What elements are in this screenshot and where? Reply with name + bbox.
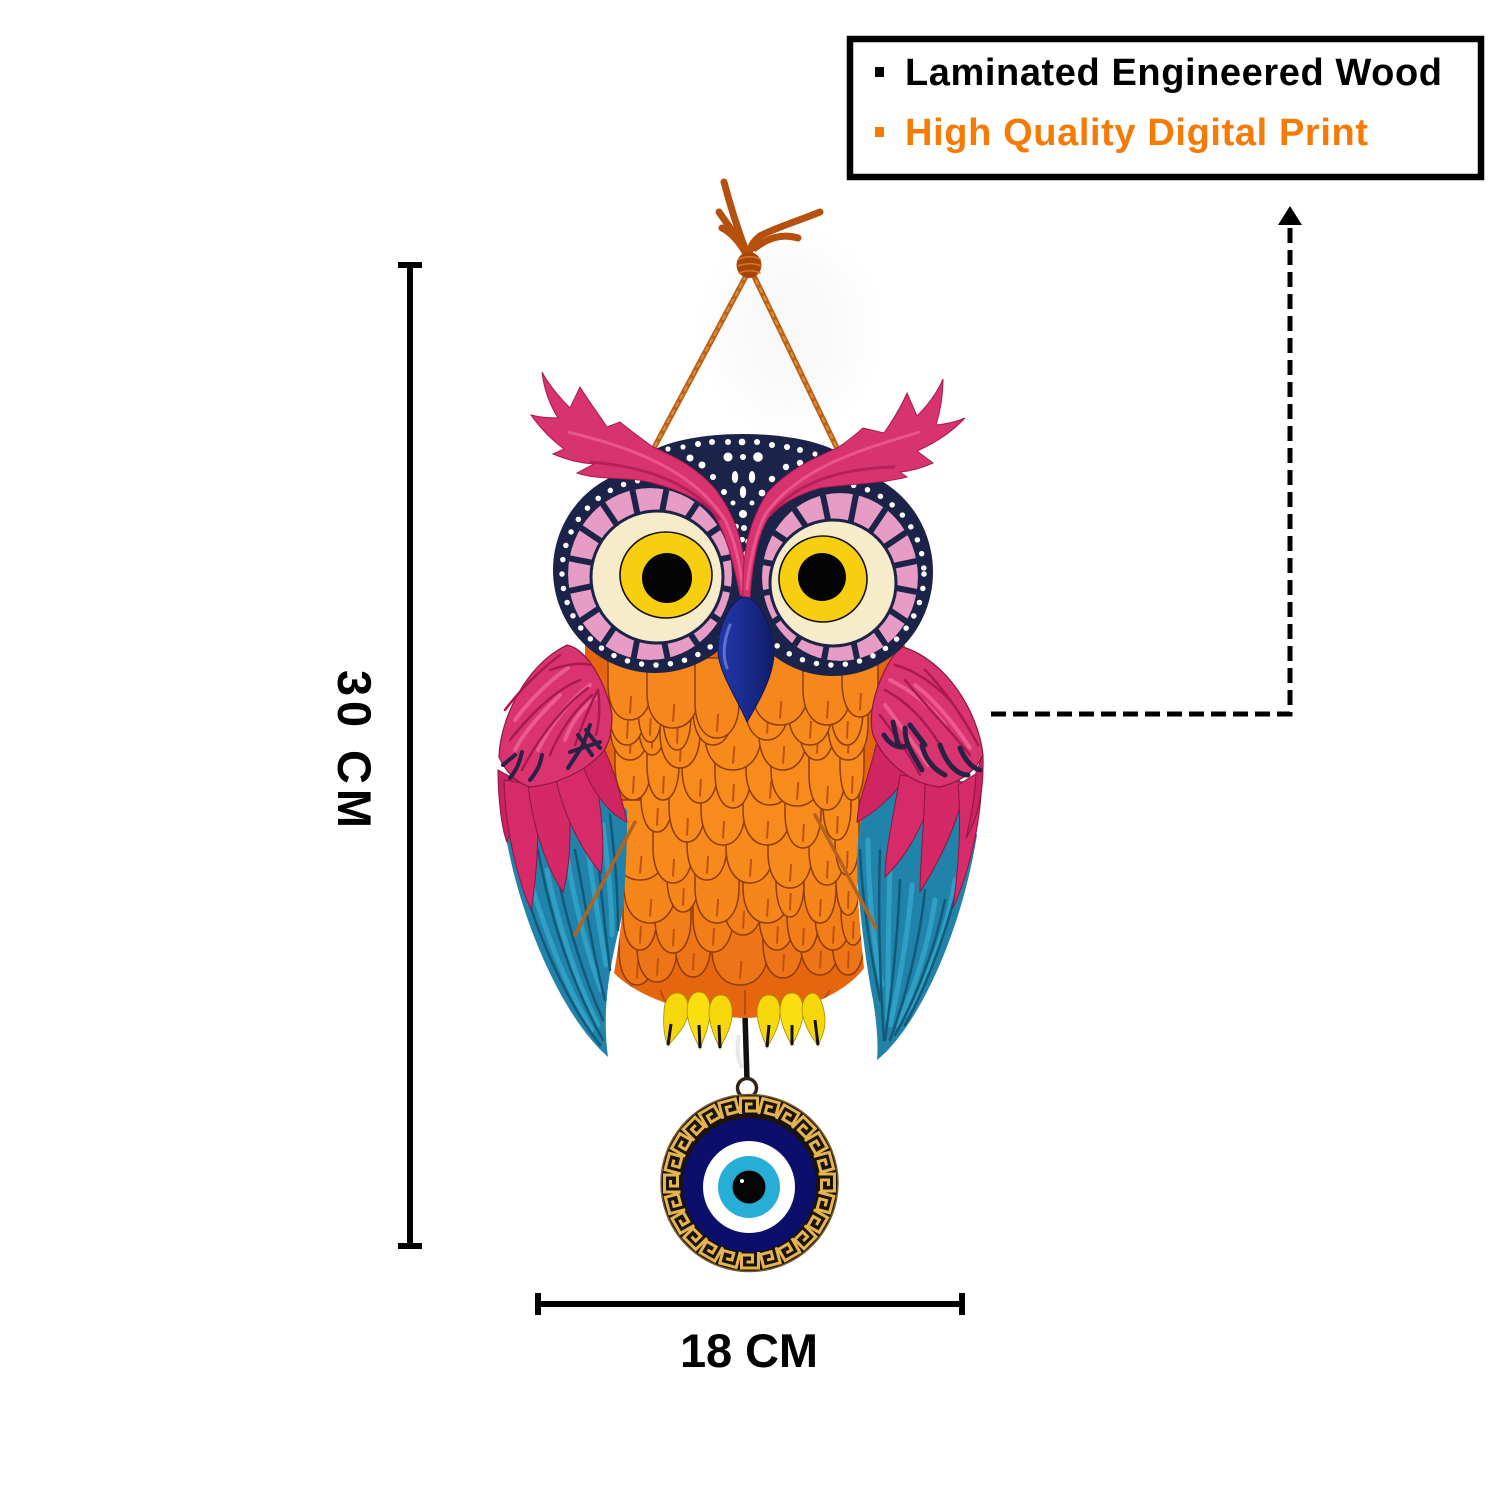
right pink ring (762, 493, 918, 661)
spec box (850, 39, 1481, 177)
height dimension line (398, 265, 422, 1246)
text: print: High Quality Digital Print (905, 112, 1368, 154)
bottom veins (630, 985, 830, 1015)
left long pink feathers (498, 740, 627, 910)
dashed arrow (991, 206, 1302, 714)
width label: 18 CM (680, 1324, 818, 1377)
face rim dots (562, 479, 924, 665)
lower rope on wings (575, 815, 876, 935)
body scales (585, 637, 905, 1020)
hanging rope (655, 182, 836, 446)
right brow (743, 379, 965, 598)
beak (718, 597, 774, 722)
dark face discs (553, 434, 933, 676)
forehead dots (665, 439, 818, 531)
left eye (591, 511, 723, 643)
bullet: material (875, 67, 884, 77)
evil eye amulet (661, 1094, 838, 1272)
right long pink feathers (857, 745, 983, 908)
right wing shoulder (871, 647, 983, 787)
head (531, 372, 965, 722)
width dimension line (538, 1293, 962, 1315)
bullet: print (875, 127, 884, 137)
height label: 30 CM (328, 670, 381, 828)
left wing shoulder (499, 645, 612, 787)
right eye (770, 520, 896, 646)
claws (664, 992, 825, 1049)
greek key band (664, 1098, 834, 1268)
owl (498, 372, 983, 1060)
left claws (664, 992, 732, 1049)
left brow (531, 372, 747, 598)
right claws (757, 993, 825, 1048)
scale rows (608, 637, 878, 985)
cord and ring (738, 1015, 756, 1098)
right blue feathers (855, 780, 977, 1060)
rope shadow (720, 245, 860, 415)
left pink ring (568, 488, 732, 660)
left blue feathers (505, 770, 629, 1057)
text: material: Laminated Engineered Wood (905, 52, 1442, 94)
